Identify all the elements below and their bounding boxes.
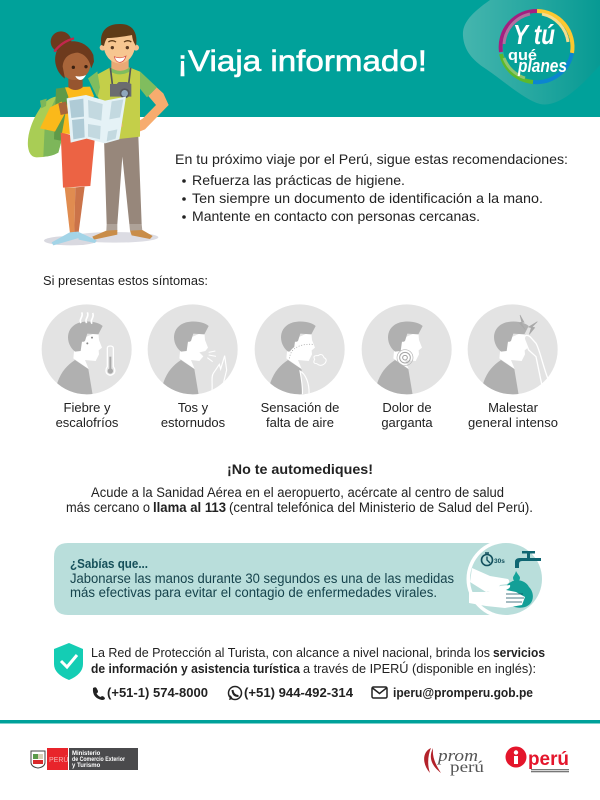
symptom: general malaise <box>468 304 558 395</box>
title: ¡Viaja informado! <box>177 45 427 78</box>
symptoms heading: Si presentas estos síntomas: <box>43 273 208 288</box>
symptom label: sore throat: garganta <box>381 415 433 430</box>
woman <box>28 96 65 157</box>
warning text: llama al 113 <box>153 500 226 515</box>
warning text <box>66 485 533 515</box>
symptom label: general malaise: general intenso <box>468 415 558 430</box>
warning heading: ¡No te automediques! <box>227 461 373 477</box>
logo: PromPerú <box>424 746 484 776</box>
tourist network text: a través de IPERÚ (disponible en inglés): <box>303 661 536 676</box>
logo: Y tú qué planes: Y tú <box>513 19 555 50</box>
symptom label: shortness of breath: falta de aire <box>266 415 334 430</box>
contact: email: iperu@promperu.gob.pe <box>393 685 533 700</box>
symptom label: sore throat: Dolor de <box>382 400 432 415</box>
symptom label: shortness of breath <box>261 400 339 430</box>
symptom label: shortness of breath: Sensación de <box>261 400 339 415</box>
tourist network text: servicios <box>493 645 545 660</box>
logo: Ministerio de Comercio Exterior y Turismo: y Turismo <box>72 763 101 769</box>
panel: did you know: ¿Sabías que... <box>70 556 148 571</box>
panel: did you know: más efectivas para evitar el contagio de enfermedades virales. <box>70 585 437 600</box>
symptom label: cough: estornudos <box>161 415 226 430</box>
intro text: En tu próximo viaje por el Perú, sigue estas recomendaciones: <box>175 151 568 167</box>
warning text: (central telefónica del Ministerio de Salud del Perú). <box>229 500 533 515</box>
logo: Ministerio de Comercio Exterior y Turismo <box>31 748 138 770</box>
symptom label: general malaise <box>468 400 558 430</box>
symptom label: fever <box>56 400 119 430</box>
intro text: Ten siempre un documento de identificación a la mano. <box>192 190 543 206</box>
contact: whatsapp: (+51) 944-492-314 <box>244 685 354 700</box>
intro text: Refuerza las prácticas de higiene. <box>192 172 405 188</box>
panel: did you know: Jabonarse las manos durante 30 segundos es una de las medidas <box>70 571 454 586</box>
logo: Y tú qué planes <box>501 11 573 82</box>
symptom label: general malaise: Malestar <box>488 400 539 415</box>
map <box>67 95 126 143</box>
symptom: cough <box>148 304 238 395</box>
illustration: travelling couple <box>28 24 169 245</box>
icon: hand washing: 30s <box>494 558 505 565</box>
tourist network text: La Red de Protección al Turista, con alcance a nivel nacional, brinda los <box>91 645 490 660</box>
logo: iPerú <box>506 746 569 772</box>
header logo blob <box>463 0 600 104</box>
symptom label: cough <box>161 400 226 430</box>
logo: Ministerio de Comercio Exterior y Turismo: de Comercio Exterior <box>72 757 126 763</box>
logo: PromPerú: perú <box>450 759 484 776</box>
symptom label: cough: Tos y <box>178 400 209 415</box>
logo: Ministerio de Comercio Exterior y Turismo: Ministerio <box>72 751 101 757</box>
intro text <box>175 151 568 224</box>
symptom label: fever: Fiebre y <box>64 400 111 415</box>
contact: phone: (+51-1) 574-8000 <box>107 685 208 700</box>
logo: PromPerú: prom <box>437 746 478 765</box>
icon: shield with check <box>54 643 83 680</box>
icon: hand washing <box>466 540 546 618</box>
logo: iPerú: perú <box>528 749 569 770</box>
header band <box>0 0 600 117</box>
tourist network text: de información y asistencia turística <box>91 661 301 676</box>
warning text: más cercano o <box>66 500 150 515</box>
panel: did you know <box>54 543 490 615</box>
tourist network text <box>91 645 545 676</box>
warning text: Acude a la Sanidad Aérea en el aeropuerto, acércate al centro de salud <box>91 485 504 500</box>
intro text: Mantente en contacto con personas cercanas. <box>192 208 480 224</box>
symptom label: sore throat <box>381 400 433 430</box>
symptom: sore throat <box>362 304 452 395</box>
symptom: fever <box>42 304 132 395</box>
man <box>104 136 142 224</box>
symptom label: fever: escalofríos <box>56 415 119 430</box>
logo: Y tú qué planes: planes <box>517 56 567 76</box>
symptom: shortness of breath <box>255 304 345 395</box>
logo: Ministerio de Comercio Exterior y Turismo: PERÚ <box>49 755 68 764</box>
logo: Y tú qué planes: qué <box>508 47 537 64</box>
